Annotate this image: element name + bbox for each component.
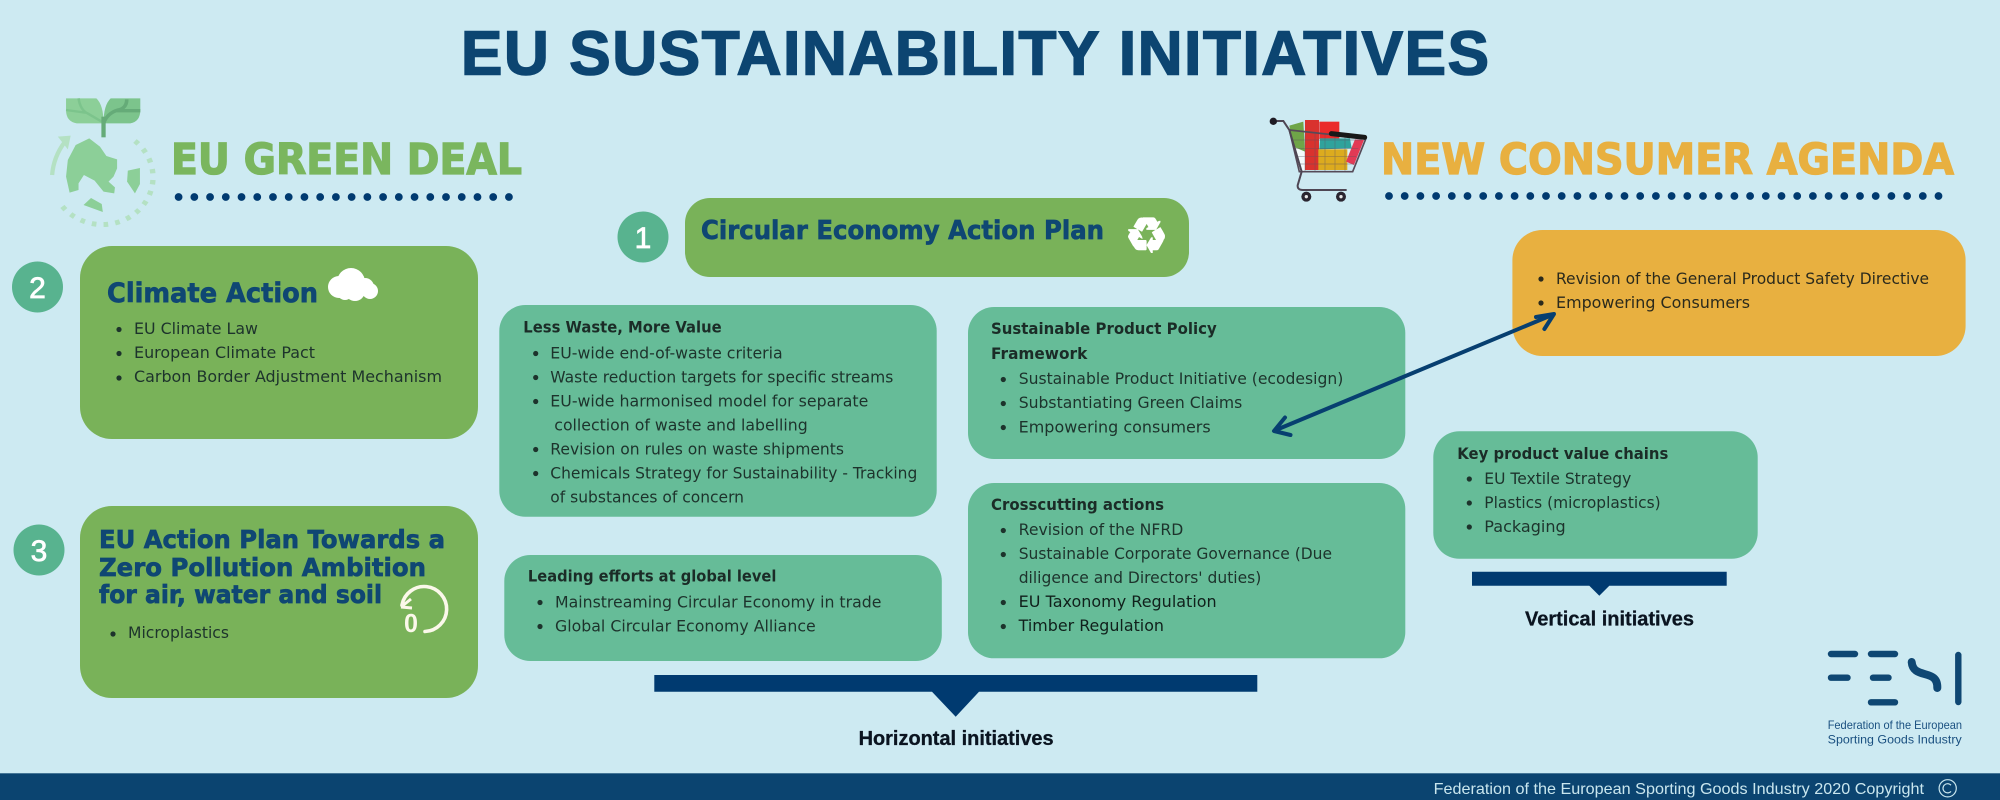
less waste bullet list: of substances of concern <box>550 488 744 506</box>
panel: Leading efforts at global level <box>504 555 942 661</box>
key product bullet list: Packaging <box>1484 518 1566 536</box>
panel: Less Waste, More Value <box>499 305 937 517</box>
heading: sustainable product policy: Framework <box>991 345 1088 363</box>
heading: EU Green Deal: EU GREEN DEAL <box>171 136 522 185</box>
panel: Zero Pollution <box>80 506 478 698</box>
icon: zero with circular arrow <box>401 587 447 638</box>
heading: key product: Key product value chains <box>1457 445 1668 463</box>
badge 3: 3 <box>31 535 47 568</box>
crosscutting bullet list: Sustainable Corporate Governance (Due <box>1019 545 1332 563</box>
badge 3 <box>14 524 64 576</box>
logo caption <box>1828 718 1962 747</box>
badge 1 <box>618 212 668 262</box>
less waste bullet list: Chemicals Strategy for Sustainability - Tracking <box>550 464 917 482</box>
icon: shopping cart <box>1270 118 1366 202</box>
icon: recycle: ♻ <box>1125 208 1168 264</box>
consumer agenda bullet list: Empowering Consumers <box>1556 294 1750 312</box>
crosscutting bullet list <box>1001 521 1332 635</box>
key product bullet list: EU Textile Strategy <box>1484 470 1631 488</box>
icon: cloud <box>328 268 378 301</box>
less waste bullet list: EU-wide end-of-waste criteria <box>550 344 783 362</box>
heading: climate action: Climate Action <box>107 278 318 309</box>
footer bar <box>0 773 2000 800</box>
dotted divider: consumer agenda <box>1389 192 1940 200</box>
icon: copyright <box>1939 780 1956 797</box>
crosscutting bullet list: EU Taxonomy Regulation <box>1019 593 1217 611</box>
footer text: Federation of the European Sporting Goods Industry 2020 Copyright <box>1434 781 1925 798</box>
heading: circular economy: Circular Economy Action Plan <box>701 216 1104 246</box>
panel: Sustainable Product Policy Framework <box>968 307 1405 459</box>
crosscutting bullet list: Timber Regulation <box>1018 617 1164 635</box>
icon: zero with circular arrow: 0 <box>404 608 418 638</box>
consumer agenda bullet list: Revision of the General Product Safety Directive <box>1556 270 1929 288</box>
consumer agenda bullet list <box>1538 270 1929 312</box>
panel: consumer agenda <box>1512 230 1966 356</box>
zero pollution bullet list: Microplastics <box>128 624 229 642</box>
sustainable product bullet list <box>1001 370 1343 436</box>
less waste bullet list: collection of waste and labelling <box>554 416 808 434</box>
climate bullet list: European Climate Pact <box>134 344 315 362</box>
less waste bullet list: EU-wide harmonised model for separate <box>550 392 868 410</box>
key product bullet list <box>1467 470 1661 536</box>
heading: leading efforts: Leading efforts at global level <box>528 568 776 586</box>
logo mark <box>1831 654 1958 702</box>
crosscutting bullet list: Revision of the NFRD <box>1019 521 1183 539</box>
leading efforts bullet list <box>537 593 881 635</box>
title: EU SUSTAINABILITY INITIATIVES <box>461 20 1489 89</box>
heading: zero pollution <box>99 525 445 609</box>
climate bullet list: Carbon Border Adjustment Mechanism <box>134 368 442 386</box>
less waste bullet list: Waste reduction targets for specific streams <box>550 368 893 386</box>
panel: Climate Action <box>80 246 478 439</box>
heading: sustainable product policy: Sustainable Product Policy <box>991 320 1217 338</box>
panel: Key product value chains <box>1433 431 1758 559</box>
badge 2 <box>12 262 63 312</box>
climate bullet list: EU Climate Law <box>134 320 258 338</box>
leading efforts bullet list: Global Circular Economy Alliance <box>555 617 816 635</box>
badge 1: 1 <box>635 222 651 255</box>
heading: zero pollution: EU Action Plan Towards a <box>99 525 445 554</box>
icon: globe with sprout <box>52 98 153 225</box>
sustainable product bullet list: Sustainable Product Initiative (ecodesign) <box>1019 370 1343 388</box>
key product bullet list: Plastics (microplastics) <box>1484 494 1661 512</box>
label: vertical initiatives: Vertical initiatives <box>1525 609 1694 631</box>
sustainable product bullet list: Empowering consumers <box>1019 418 1211 436</box>
heading: crosscutting: Crosscutting actions <box>991 496 1164 514</box>
panel: Circular Economy Action Plan <box>685 198 1189 277</box>
badge 2: 2 <box>29 272 46 305</box>
crosscutting bullet list: diligence and Directors' duties) <box>1019 569 1261 587</box>
heading: sustainable product policy <box>991 320 1217 363</box>
less waste bullet list <box>533 344 917 506</box>
logo caption: Federation of the European <box>1828 718 1962 732</box>
arrow: two-way link between consumer panels <box>1274 314 1554 435</box>
dotted divider: green deal <box>179 193 510 201</box>
heading: zero pollution: Zero Pollution Ambition <box>99 553 426 582</box>
bracket: horizontal initiatives <box>654 675 1257 750</box>
heading: zero pollution: for air, water and soil <box>99 580 382 609</box>
heading: New Consumer Agenda: NEW CONSUMER AGENDA <box>1381 136 1954 185</box>
leading efforts bullet list: Mainstreaming Circular Economy in trade <box>555 593 881 611</box>
climate bullet list <box>116 320 442 386</box>
sustainable product bullet list: Substantiating Green Claims <box>1019 394 1242 412</box>
less waste bullet list: Revision on rules on waste shipments <box>550 440 844 458</box>
label: horizontal initiatives: Horizontal initiatives <box>859 728 1054 750</box>
bracket: vertical initiatives <box>1472 572 1727 631</box>
logo caption: Sporting Goods Industry <box>1828 733 1962 747</box>
heading: less waste: Less Waste, More Value <box>523 319 722 337</box>
logo: FESI <box>1828 654 1962 747</box>
panel: Crosscutting actions <box>968 483 1405 658</box>
